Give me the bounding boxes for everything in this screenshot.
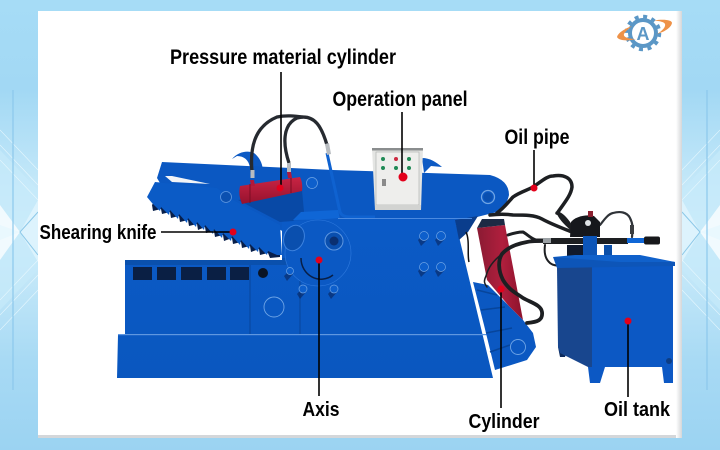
hydraulic valve [543,211,660,262]
operation panel [372,148,423,210]
label: operation panel: Operation panel [332,88,468,111]
label: oil tank [604,318,671,421]
label: pressure material cylinder: Pressure material cylinder [170,46,396,69]
label: cylinder [468,286,540,433]
rear steps [473,282,536,370]
label: pressure material cylinder [170,46,396,192]
oil pipes [484,175,633,323]
main frame [117,218,493,378]
oil tank [553,255,675,383]
bed slots [133,267,249,280]
logo [617,16,672,50]
light wedge above frame [293,210,340,220]
rear hooks [232,152,263,170]
upper jaw and top plate [157,162,509,232]
label: oil pipe: Oil pipe [504,126,570,149]
label: shearing knife [40,222,236,244]
label: operation panel [332,88,468,182]
label: oil pipe [504,126,570,192]
blue pipe on top [327,153,375,217]
machine [117,152,536,378]
pressure material cylinder [239,116,331,204]
knife teeth shadow [152,200,280,258]
axis disc [285,220,351,286]
bolts [284,234,445,299]
label: axis: Axis [302,399,340,421]
label: cylinder: Cylinder [468,411,540,433]
label: axis [302,256,340,421]
knife jaw [147,182,282,255]
logo: A [636,24,650,44]
label: oil tank: Oil tank [604,399,671,421]
cylinder shadow wedge [238,190,304,222]
label: shearing knife: Shearing knife [40,222,156,244]
oil cylinder [477,219,523,320]
